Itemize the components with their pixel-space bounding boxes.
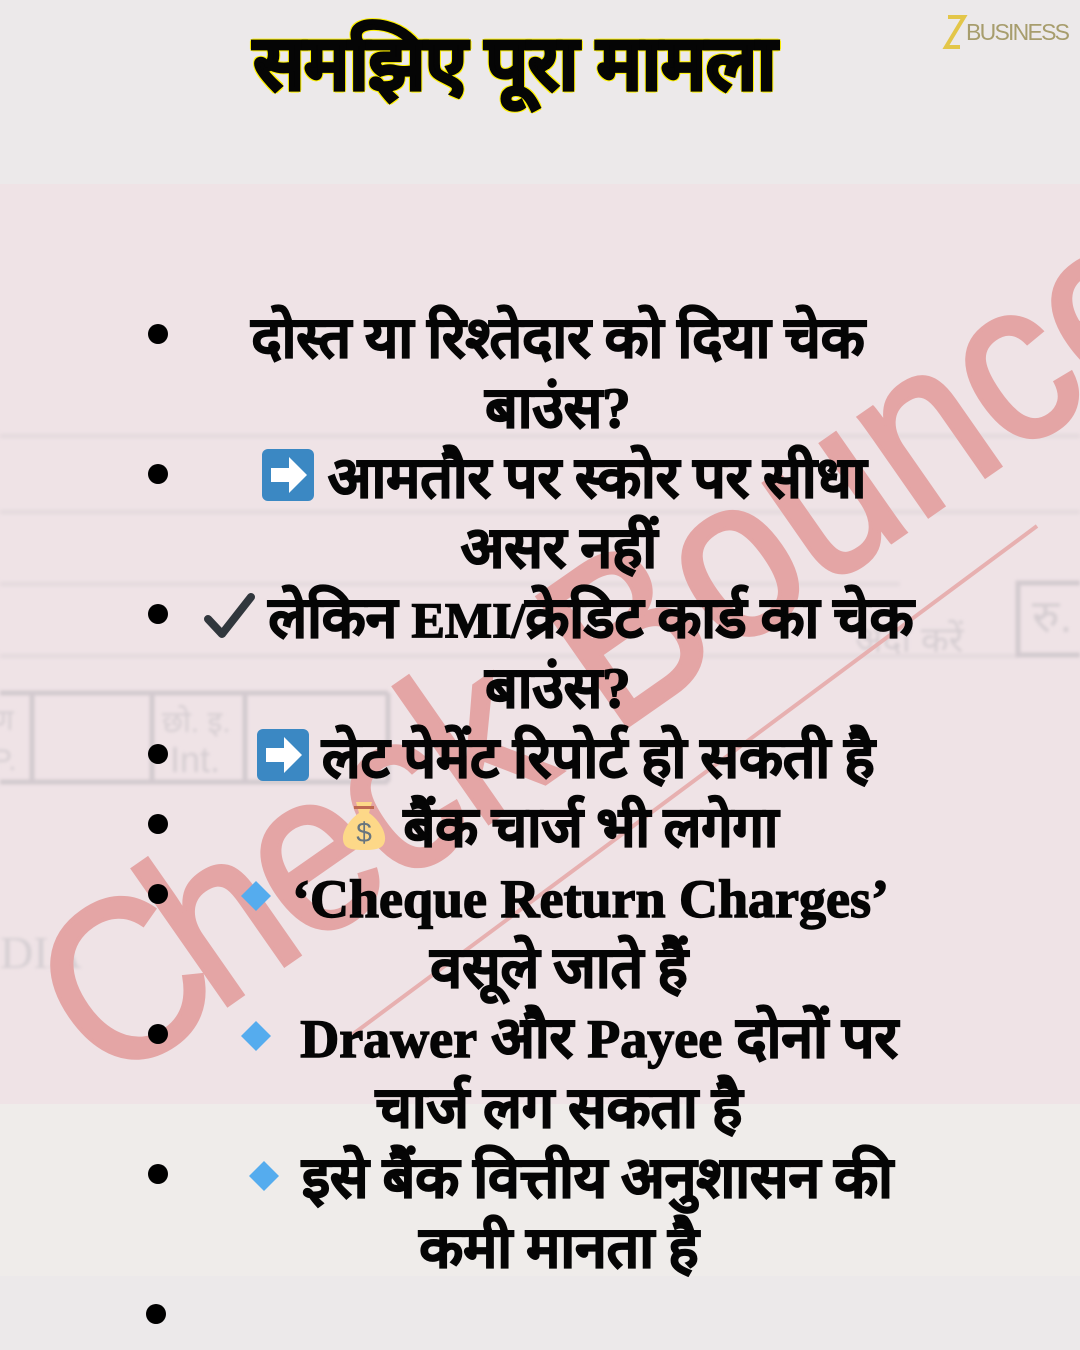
icon: money bag: $	[356, 817, 372, 848]
item 8 continuation: कमी मानता है	[419, 1217, 699, 1280]
background: faded cheque with watermark: छो. इ.	[162, 705, 231, 739]
text: बाउंस?	[485, 377, 631, 440]
icon: money bag	[343, 802, 385, 850]
item 7 text: Drawer और Payee दोनों पर	[300, 1007, 898, 1070]
logo: Z Business: BUSINESS	[966, 19, 1070, 45]
background: faded cheque with watermark: DIA	[0, 927, 82, 978]
background: faded cheque with watermark: रु.	[1032, 590, 1072, 642]
item 8 text: इसे बैंक वित्तीय अनुशासन की	[302, 1147, 893, 1210]
item 6 text: ‘Cheque Return Charges’	[292, 869, 889, 929]
title: समझिए पूरा मामला	[254, 23, 776, 106]
icon: arrow 2	[257, 729, 309, 781]
icon: diamond 2	[241, 1021, 271, 1051]
item 7 continuation: चार्ज लग सकता है	[376, 1077, 742, 1140]
bullet list	[146, 304, 916, 1324]
item 3 continuation: बाउंस?	[485, 657, 631, 720]
bullet dots	[146, 324, 168, 1324]
background: faded cheque with watermark: Int.	[170, 739, 220, 780]
item 6 continuation: वसूले जाते हैं	[430, 937, 688, 1000]
item 2 text: आमतौर पर स्कोर पर सीधा	[328, 447, 866, 510]
background: faded cheque with watermark: अदा करें	[855, 619, 965, 660]
icon: diamond 1	[241, 881, 271, 911]
icon: diamond 3	[249, 1161, 279, 1191]
item 3 text: लेकिन EMI/क्रेडिट कार्ड का चेक	[268, 587, 914, 650]
logo: Z Business	[942, 15, 1070, 49]
item 2 continuation: असर नहीं	[461, 517, 657, 580]
icon: check mark	[204, 593, 255, 638]
item 4 text: लेट पेमेंट रिपोर्ट हो सकती है	[322, 727, 875, 790]
icon: arrow 1	[262, 449, 314, 501]
item 5 text: बैंक चार्ज भी लगेगा	[404, 798, 778, 859]
item 1 text: दोस्त या रिश्तेदार को दिया चेक	[251, 307, 865, 370]
item 1 text	[250, 304, 868, 440]
